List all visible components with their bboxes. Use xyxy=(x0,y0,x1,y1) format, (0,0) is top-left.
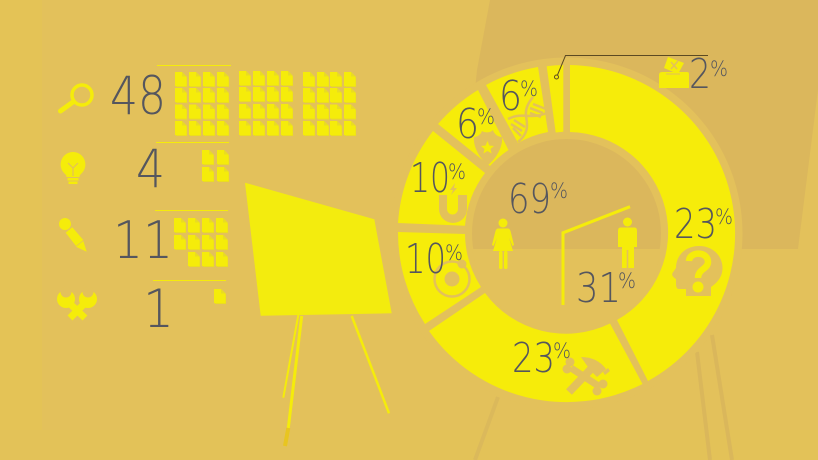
label 6% shield xyxy=(456,100,495,148)
gender split line xyxy=(563,207,630,305)
background: faint easel legs xyxy=(475,255,732,460)
label 6% dna: % xyxy=(520,77,538,101)
icon: dna xyxy=(508,97,548,142)
segment 10% upper left xyxy=(398,131,485,226)
label 10% lower: 10 xyxy=(405,235,446,283)
label 31%: % xyxy=(618,269,636,293)
easel legs xyxy=(283,315,389,446)
label 69%: 69 xyxy=(508,175,551,223)
row 1 rule xyxy=(157,64,231,66)
icon: magnet xyxy=(439,183,467,223)
row 4: crossed wrenches icon xyxy=(57,286,97,318)
donut halo ring xyxy=(391,58,743,409)
label 10% lower: % xyxy=(445,241,463,265)
row 2: light bulb icon xyxy=(61,152,85,184)
row 2 value 4: 4 xyxy=(136,139,165,200)
row 4 document xyxy=(214,289,226,304)
inner circle lower fill xyxy=(472,249,660,334)
label 23% right: % xyxy=(715,205,733,229)
label 6% dna: 6 xyxy=(499,72,522,120)
row 2 rule xyxy=(156,142,229,144)
segment 6% shield xyxy=(438,90,508,166)
row 4 value 1: 1 xyxy=(143,279,174,340)
icon: police shield xyxy=(474,130,502,165)
label 31%: 31 xyxy=(576,264,621,312)
row 1 value 48: 48 xyxy=(110,66,166,127)
segment 10% lower left xyxy=(398,232,481,324)
row 3 documents xyxy=(174,218,228,267)
row 3 value 11: 11 xyxy=(113,211,173,271)
callout leader for 2% xyxy=(554,56,708,79)
segment 23% right xyxy=(570,65,735,381)
row 1: magnifier icon xyxy=(60,85,92,111)
label 10% upper: % xyxy=(448,160,466,184)
icon: question head xyxy=(672,246,722,296)
label 10% upper: 10 xyxy=(410,154,450,202)
row 2 documents xyxy=(202,150,229,182)
label 69%: % xyxy=(550,179,568,203)
row 4 rule xyxy=(153,280,226,282)
label 6% shield: 6 xyxy=(456,100,479,148)
segment 23% bottom xyxy=(429,293,642,402)
icon: ballot box xyxy=(659,57,689,88)
segment 6% dna xyxy=(486,67,548,143)
segment 2% xyxy=(547,65,563,132)
row 1 documents xyxy=(175,71,356,136)
background: darker wall panel xyxy=(459,0,818,249)
easel board xyxy=(245,183,392,316)
row 3: pencil icon xyxy=(59,218,87,252)
label 2%: 2 xyxy=(689,50,711,98)
icon: man xyxy=(618,218,637,268)
label 23% bottom: 23 xyxy=(512,334,555,382)
label 6% shield: % xyxy=(477,105,495,129)
donut chart xyxy=(398,65,735,402)
label 23% bottom: % xyxy=(553,339,571,363)
label 2% xyxy=(689,50,728,98)
label 2%: % xyxy=(710,57,728,81)
icon: diamond ring xyxy=(434,260,470,296)
icon: hammer and bone xyxy=(562,357,610,396)
label 6% dna xyxy=(499,72,538,120)
row 3 rule xyxy=(155,210,228,212)
label 23% right: 23 xyxy=(674,200,717,248)
icon: woman xyxy=(492,218,514,269)
